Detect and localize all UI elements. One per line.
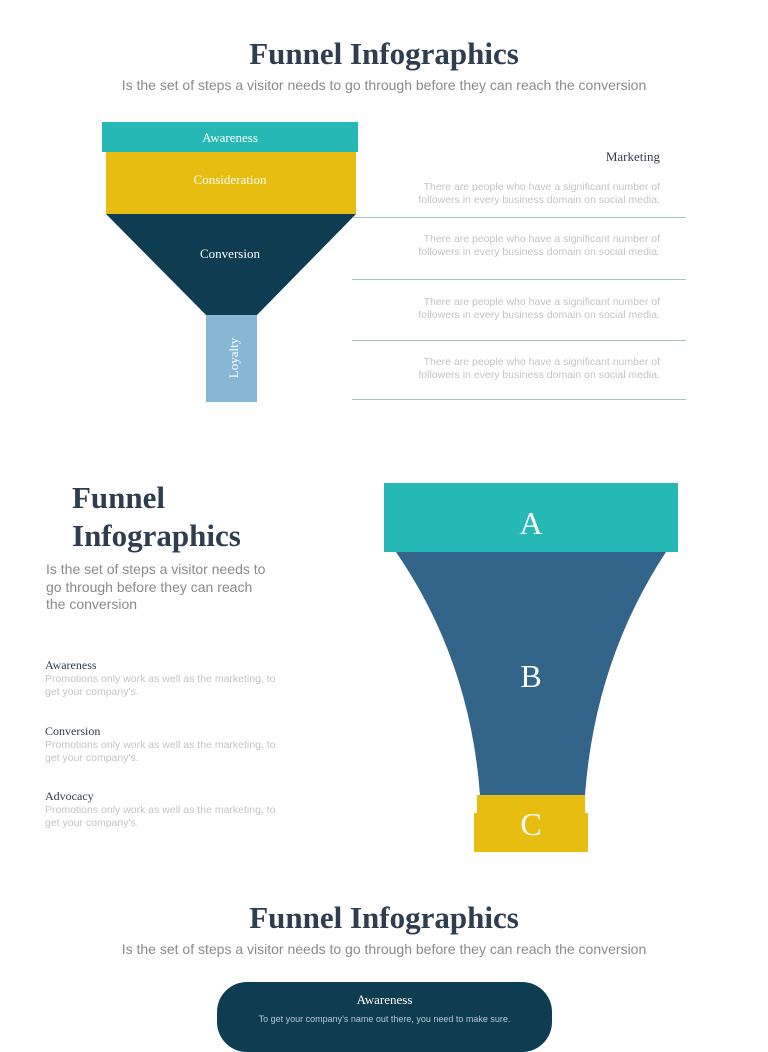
marketing heading: Marketing <box>606 149 660 164</box>
title 3: Funnel Infographics <box>249 900 519 935</box>
description 4: There are people who have a significant number of followers in every business domain on social media. <box>418 356 660 381</box>
subtitle 1: Is the set of steps a visitor needs to go through before they can reach the conversion <box>122 77 646 93</box>
list item awareness <box>45 658 276 698</box>
awareness band <box>102 122 358 152</box>
list item conversion: Promotions only work as well as the marketing, to get your company's. <box>45 739 276 764</box>
list item awareness: Promotions only work as well as the marketing, to get your company's. <box>45 673 276 698</box>
title 2: Funnel <box>72 480 165 515</box>
title 2 <box>72 480 241 553</box>
list item awareness: Awareness <box>45 658 97 672</box>
list item advocacy: Advocacy <box>45 789 94 803</box>
title 1: Funnel Infographics <box>249 36 519 71</box>
loyalty band: Loyalty <box>226 337 241 378</box>
awareness pill: Awareness <box>357 992 412 1007</box>
awareness pill <box>217 982 552 1052</box>
stage B: B <box>520 658 542 694</box>
conversion band: Conversion <box>200 246 260 261</box>
stage C <box>474 795 588 852</box>
title 2: Infographics <box>72 518 241 553</box>
stage B <box>396 552 666 795</box>
funnel 2 <box>384 483 678 852</box>
list item conversion: Conversion <box>45 724 100 738</box>
consideration band <box>106 152 356 214</box>
awareness band: Awareness <box>202 130 258 145</box>
consideration band: Consideration <box>194 172 267 187</box>
description 2: There are people who have a significant number of followers in every business domain on social media. <box>418 233 660 258</box>
stage A <box>384 483 678 552</box>
description 1: There are people who have a significant number of followers in every business domain on social media. <box>418 181 660 206</box>
stage C: C <box>520 806 542 842</box>
stage A: A <box>519 505 543 541</box>
subtitle 3: Is the set of steps a visitor needs to go through before they can reach the conversion <box>122 941 646 957</box>
list item conversion <box>45 724 276 764</box>
list item advocacy: Promotions only work as well as the marketing, to get your company's. <box>45 804 276 829</box>
conversion band <box>106 214 356 315</box>
funnel 1 <box>102 122 358 402</box>
subtitle 2: Is the set of steps a visitor needs to go through before they can reach the conversion <box>46 561 265 612</box>
awareness pill: To get your company's name out there, you need to make sure. <box>259 1014 510 1024</box>
list item advocacy <box>45 789 276 829</box>
description 3: There are people who have a significant number of followers in every business domain on social media. <box>418 296 660 321</box>
loyalty band <box>206 315 257 402</box>
